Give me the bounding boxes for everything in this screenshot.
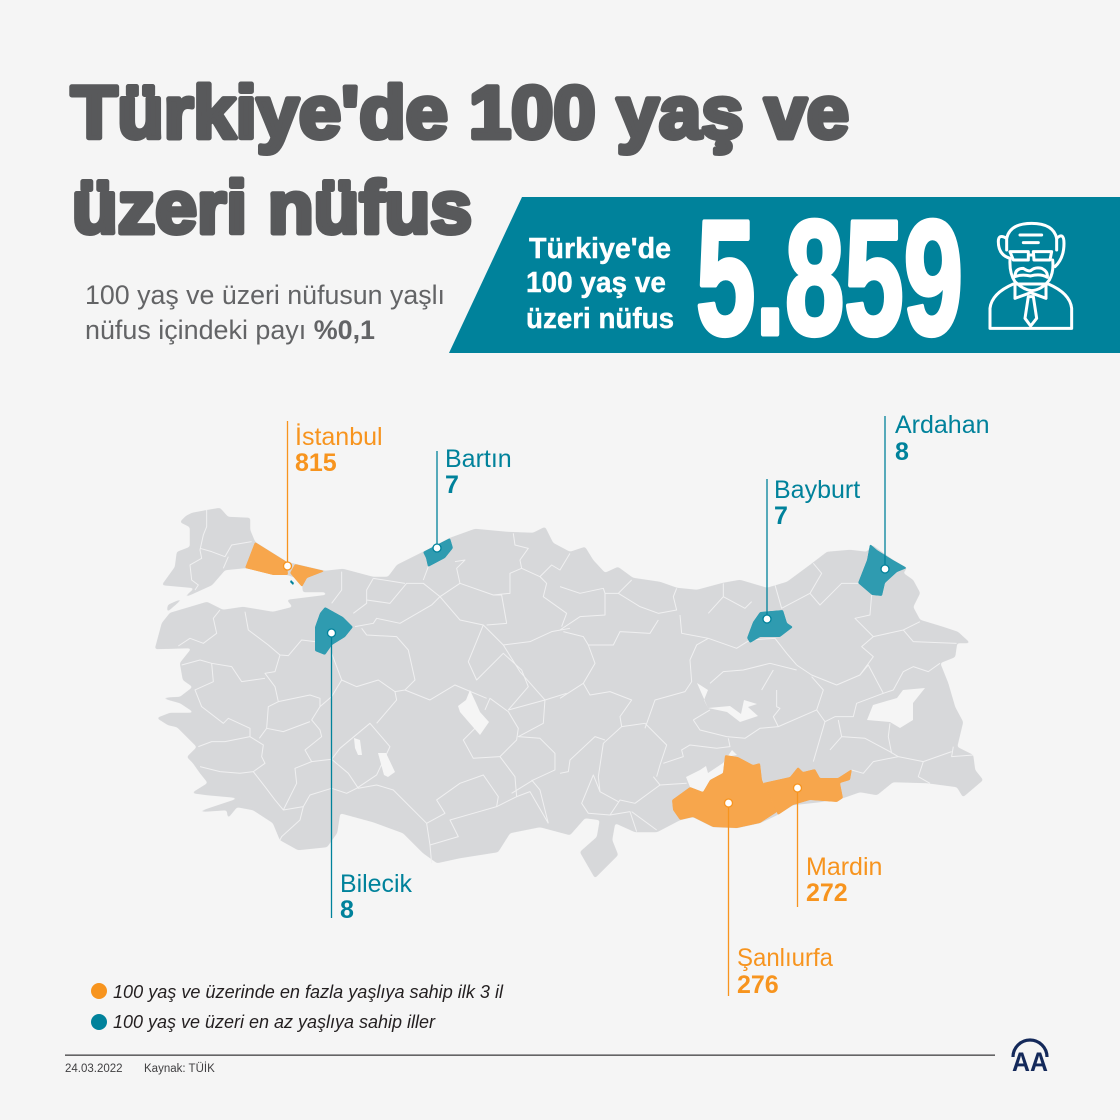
callout: Bayburt: Bayburt [774,476,860,504]
province: Mardin [763,767,852,815]
footer: 24.03.2022 [65,1063,123,1075]
subtitle text [85,280,445,345]
title: üzeri nüfus [72,166,472,249]
callout: Bilecik: 8 [340,896,354,924]
province: İstanbul [245,542,325,587]
province: Bilecik [315,607,353,655]
banner label: üzeri nüfus [526,303,674,335]
big number: 5.859 [696,186,963,369]
subtitle text: 100 yaş ve üzeri nüfusun yaşlı [85,280,445,310]
callout: Bayburt: 7 [774,502,788,530]
footer [65,1054,995,1075]
callout: Bartın [433,445,512,552]
callout: Bartın: Bartın [445,445,512,473]
map of Turkey [155,508,983,878]
province: Şanlıurfa [672,755,777,828]
callout: Ardahan [881,411,990,573]
banner label [526,233,674,335]
title [71,71,849,249]
callout: Mardin: Mardin [806,853,882,881]
callout: İstanbul: 815 [295,449,337,477]
callout: Bilecik [328,629,412,924]
callout: Mardin: 272 [806,879,848,907]
province: Ardahan [858,544,907,596]
banner label: Türkiye'de [529,233,671,265]
small island marker [290,580,294,585]
province: Bayburt [747,610,793,643]
callout: Mardin [794,784,882,907]
callout: Ardahan: Ardahan [895,411,990,439]
province: Bartın [423,538,453,567]
logo: AA: AA [1012,1047,1048,1077]
subtitle text: nüfus içindeki payı %0,1 [85,315,375,345]
callout: Bartın: 7 [445,471,459,499]
footer: Kaynak: TÜİK [144,1062,215,1075]
title: Türkiye'de 100 yaş ve [71,71,849,154]
icon: elderly man [990,223,1072,328]
land shape [155,508,983,878]
legend: 100 yaş ve üzeri en az yaşlıya sahip iller [113,1012,436,1032]
callout: Şanlıurfa [724,799,833,999]
callout: Ardahan: 8 [895,438,909,466]
legend [91,982,504,1032]
province borders east [560,563,973,832]
callout: İstanbul: İstanbul [295,422,383,451]
callout: Şanlıurfa: Şanlıurfa [737,944,833,972]
banner label: 100 yaş ve [526,267,666,299]
banner: total population [449,186,1120,369]
province borders west [178,510,570,863]
callout: Şanlıurfa: 276 [737,971,779,999]
legend: 100 yaş ve üzerinde en fazla yaşlıya sahip ilk 3 il [113,982,504,1002]
lakes [354,683,925,792]
callout: Bayburt [763,476,860,623]
callout: Bilecik: Bilecik [340,870,412,898]
callout: İstanbul [284,421,383,570]
